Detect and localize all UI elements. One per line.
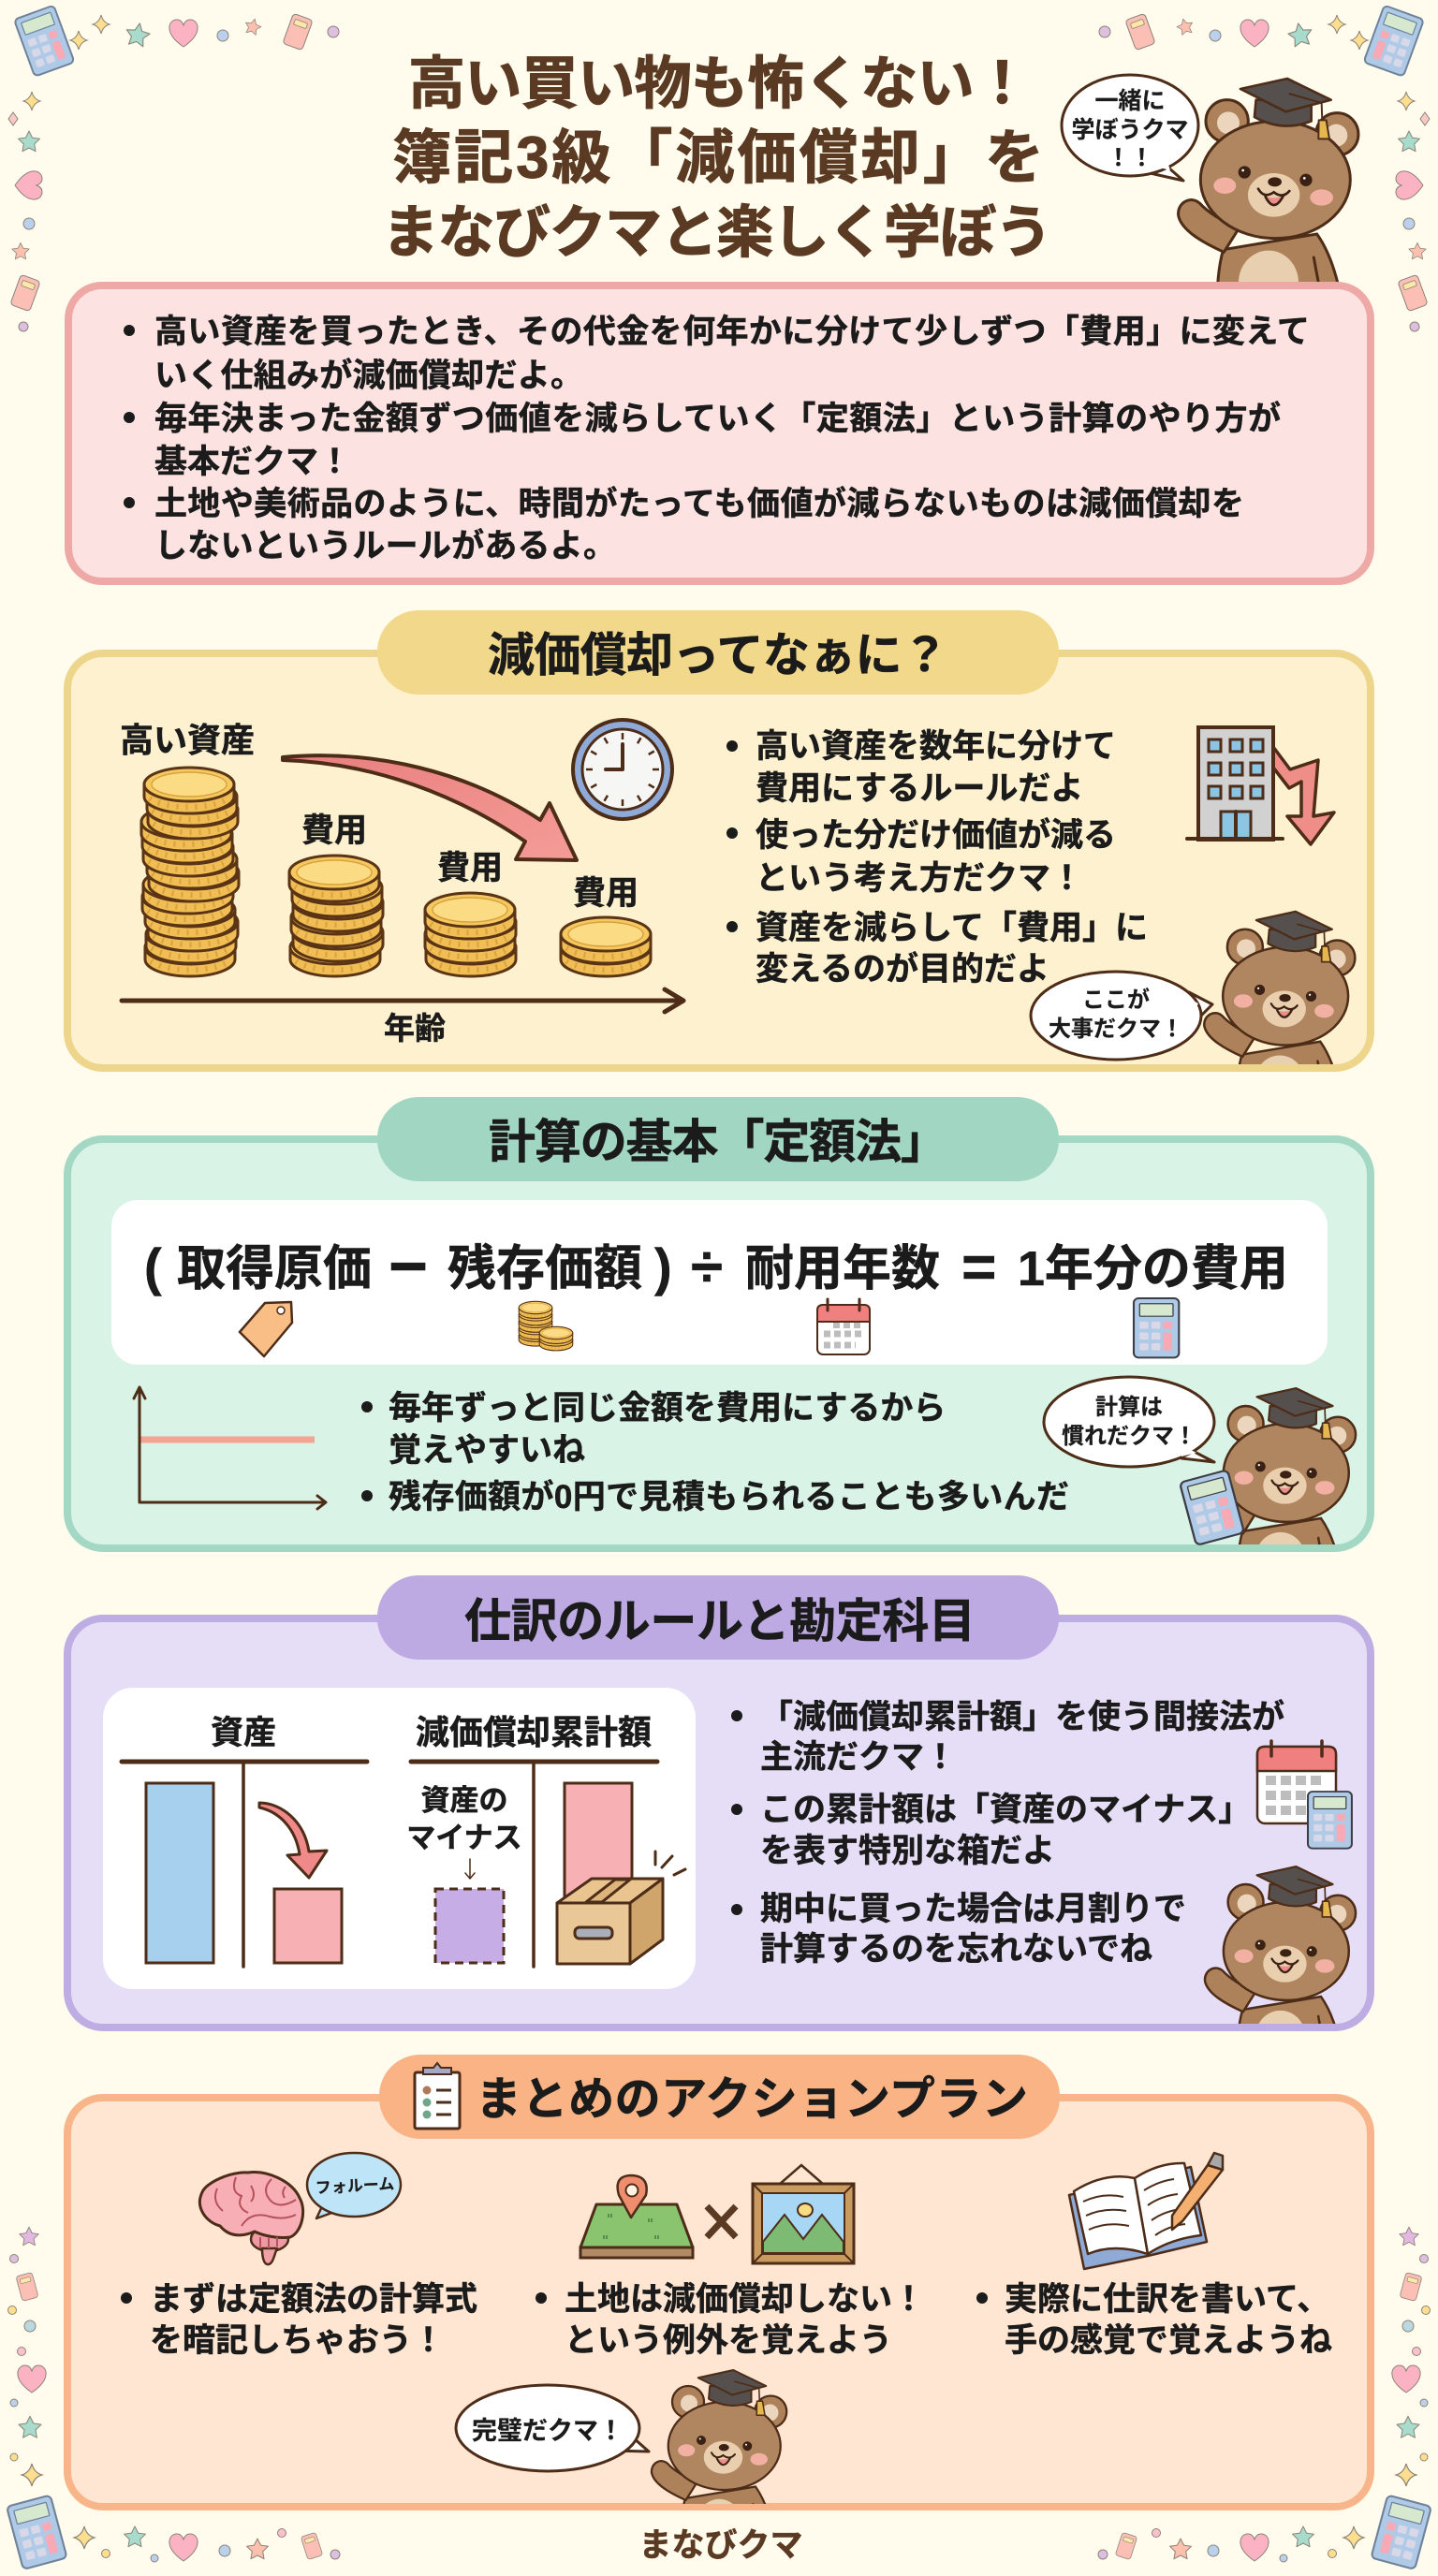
icon: calendar and calculator bbox=[1257, 1741, 1352, 1849]
timeline axis bbox=[122, 989, 683, 1012]
bear mascot: journal bbox=[1204, 1866, 1357, 2024]
bullet list: 残存価額が0円で見積もられることも多いんだ bbox=[389, 1479, 1069, 1515]
bullet list: という考え方だクマ！ bbox=[756, 860, 1083, 897]
summary text: 土地や美術品のように、時間がたっても価値が減らないものは減価償却を bbox=[154, 486, 1244, 522]
heading pill bbox=[379, 2055, 1060, 2139]
formula: = bbox=[961, 1233, 996, 1300]
bullet list: 主流だクマ！ bbox=[760, 1739, 957, 1776]
bullet list bbox=[361, 1390, 1069, 1515]
heading pill bbox=[377, 1575, 1059, 1660]
speech bubble: perfect: 完璧だクマ！ bbox=[472, 2417, 624, 2445]
pink accumulated bar bbox=[565, 1783, 632, 1914]
speech bubble: forum bbox=[307, 2153, 401, 2218]
bullet list: を表す特別な箱だよ bbox=[760, 1833, 1055, 1869]
summary text: 高い資産を買ったとき、その代金を何年かに分けて少しずつ「費用」に変えて bbox=[154, 314, 1310, 350]
icon: land bbox=[580, 2175, 693, 2258]
icon: calculator held by bear bbox=[1180, 1470, 1244, 1545]
formula: ÷ bbox=[691, 1235, 723, 1299]
icon: brain bbox=[199, 2173, 303, 2264]
bullet list: 「減価償却累計額」を使う間接法が bbox=[760, 1699, 1284, 1735]
bullet list: 覚えやすいね bbox=[389, 1432, 585, 1469]
dashed purple box bbox=[435, 1889, 504, 1963]
formula: 残存価額 bbox=[448, 1242, 642, 1296]
speech bubble: top bbox=[1062, 75, 1198, 181]
bullet list: 高い資産を数年に分けて bbox=[756, 728, 1116, 765]
icon: price tag bbox=[240, 1302, 292, 1356]
bullet list: 計算するのを忘れないでね bbox=[760, 1931, 1152, 1968]
action item 1: を暗記しちゃおう！ bbox=[150, 2322, 445, 2359]
bear mascot: important bbox=[1203, 910, 1357, 1064]
bullet list: 変えるのが目的だよ bbox=[756, 951, 1049, 988]
decoration: top right corner bbox=[1099, 6, 1430, 331]
coin stack: second bbox=[289, 856, 383, 976]
icon: open book and pencil bbox=[1069, 2153, 1223, 2269]
coin stack: fourth bbox=[561, 917, 651, 976]
title bbox=[382, 51, 1052, 264]
decoration: top left corner bbox=[8, 6, 339, 331]
speech bubble: calculation bbox=[1044, 1377, 1214, 1467]
decoration: bottom left corner bbox=[7, 2227, 340, 2569]
bear mascot: top bbox=[1179, 79, 1358, 337]
title: まなびクマと楽しく学ぼう bbox=[382, 200, 1052, 264]
summary text: しないというルールがあるよ。 bbox=[154, 528, 616, 564]
heading pill: 計算の基本「定額法」 bbox=[489, 1116, 947, 1168]
speech bubble: important bbox=[1031, 972, 1212, 1060]
heading pill bbox=[377, 1097, 1059, 1181]
summary text: いく仕組みが減価償却だよ。 bbox=[154, 358, 583, 394]
icon: clock bbox=[573, 720, 672, 819]
summary text: 毎年決まった金額ずつ価値を減らしていく「定額法」という計算のやり方が bbox=[154, 401, 1281, 437]
speech bubble: calculation: 計算は bbox=[1095, 1395, 1163, 1420]
formula: 耐用年数 bbox=[745, 1242, 940, 1296]
bullet list: 毎年ずっと同じ金額を費用にするから bbox=[389, 1390, 946, 1427]
label: age: 年齢 bbox=[384, 1011, 446, 1046]
action item 1: まずは定額法の計算式 bbox=[150, 2281, 477, 2318]
panel: summary bbox=[68, 285, 1371, 581]
formula: ( bbox=[144, 1237, 162, 1296]
icon: clipboard bbox=[415, 2063, 460, 2129]
heading pill bbox=[377, 610, 1059, 695]
action item 3 bbox=[976, 2281, 1332, 2359]
label: asset minus bbox=[406, 1784, 522, 1854]
account label: asset: 資産 bbox=[211, 1715, 276, 1751]
title: 高い買い物も怖くない！ bbox=[408, 51, 1031, 115]
heading pill: まとめのアクションプラン bbox=[476, 2074, 1028, 2125]
formula: − bbox=[389, 1229, 428, 1304]
icon: cardboard box bbox=[557, 1852, 685, 1964]
arrow to reduction bbox=[259, 1803, 327, 1878]
summary text bbox=[124, 314, 1310, 564]
speech bubble: important: 大事だクマ！ bbox=[1049, 1017, 1183, 1042]
pink reduction bar bbox=[274, 1889, 342, 1963]
bullet list: 費用にするルールだよ bbox=[756, 770, 1083, 807]
speech bubble: calculation: 慣れだクマ！ bbox=[1062, 1424, 1196, 1449]
bullet list: 期中に買った場合は月割りで bbox=[760, 1891, 1186, 1927]
multiply sign bbox=[707, 2206, 736, 2237]
icon: calendar bbox=[817, 1299, 870, 1354]
speech bubble: forum: フォルーム bbox=[315, 2175, 395, 2197]
bullet list bbox=[726, 728, 1148, 988]
panel: action plan bbox=[67, 2055, 1371, 2564]
heading pill: 減価償却ってなぁに？ bbox=[488, 629, 948, 681]
action item 2 bbox=[536, 2281, 925, 2359]
account label: accumulated depreciation: 減価償却累計額 bbox=[416, 1713, 652, 1751]
label: cost 1: 費用 bbox=[301, 812, 367, 849]
label: cost 3: 費用 bbox=[573, 875, 638, 912]
coin stack: third bbox=[425, 893, 516, 976]
bullet list: 使った分だけ価値が減る bbox=[756, 817, 1116, 854]
action item 2: 土地は減価償却しない！ bbox=[565, 2281, 925, 2318]
panel: what is depreciation bbox=[64, 610, 1374, 1072]
icon: small coin stack bbox=[519, 1301, 573, 1351]
speech bubble: important: ここが bbox=[1082, 987, 1150, 1013]
bear mascot: calculator bbox=[1223, 1387, 1357, 1544]
action item 3: 実際に仕訳を書いて、 bbox=[1005, 2281, 1329, 2318]
label: asset minus: マイナス bbox=[406, 1822, 522, 1854]
bullet list: 資産を減らして「費用」に bbox=[756, 910, 1148, 946]
panel: straight-line method bbox=[67, 1097, 1371, 1604]
formula: ) bbox=[654, 1237, 672, 1296]
icon: building with falling arrow bbox=[1187, 727, 1334, 844]
icon: calculator bbox=[1134, 1298, 1179, 1357]
decoration: bottom right corner bbox=[1098, 2227, 1431, 2569]
title: 簿記3級「減価償却」を bbox=[392, 125, 1044, 191]
speech bubble: top: 学ぼうクマ bbox=[1071, 117, 1189, 143]
heading pill: 仕訳のルールと勘定科目 bbox=[464, 1595, 976, 1647]
blue asset bar bbox=[146, 1783, 213, 1963]
icon: framed picture bbox=[753, 2165, 854, 2263]
footer brand: まなびクマ bbox=[638, 2527, 803, 2564]
action item 1 bbox=[121, 2281, 477, 2359]
panel: journal rules bbox=[67, 1575, 1371, 2083]
summary text: 基本だクマ！ bbox=[154, 444, 351, 480]
speech bubble: perfect bbox=[456, 2385, 649, 2471]
label: asset minus: 資産の bbox=[421, 1784, 507, 1817]
formula: 1年分の費用 bbox=[1018, 1242, 1288, 1296]
bullet list: この累計額は「資産のマイナス」 bbox=[760, 1792, 1251, 1828]
formula: 取得原価 bbox=[177, 1242, 372, 1296]
action item 3: 手の感覚で覚えようね bbox=[1005, 2322, 1332, 2359]
chart: flat expense line bbox=[134, 1387, 326, 1509]
curved arrow bbox=[283, 755, 577, 860]
bear mascot: action plan bbox=[650, 2369, 788, 2504]
action item 2: という例外を覚えよう bbox=[565, 2322, 892, 2359]
small arrow bbox=[465, 1859, 475, 1879]
coin stack: large bbox=[141, 768, 239, 976]
label: high asset: 高い資産 bbox=[120, 721, 255, 759]
speech bubble: top: ！！ bbox=[1107, 145, 1153, 171]
speech bubble: top: 一緒に bbox=[1094, 88, 1166, 114]
T-account diagram bbox=[103, 1688, 696, 1989]
bullet list bbox=[731, 1699, 1284, 1968]
T lines bbox=[122, 1760, 657, 1764]
formula box bbox=[111, 1200, 1328, 1365]
label: cost 2: 費用 bbox=[437, 850, 503, 886]
